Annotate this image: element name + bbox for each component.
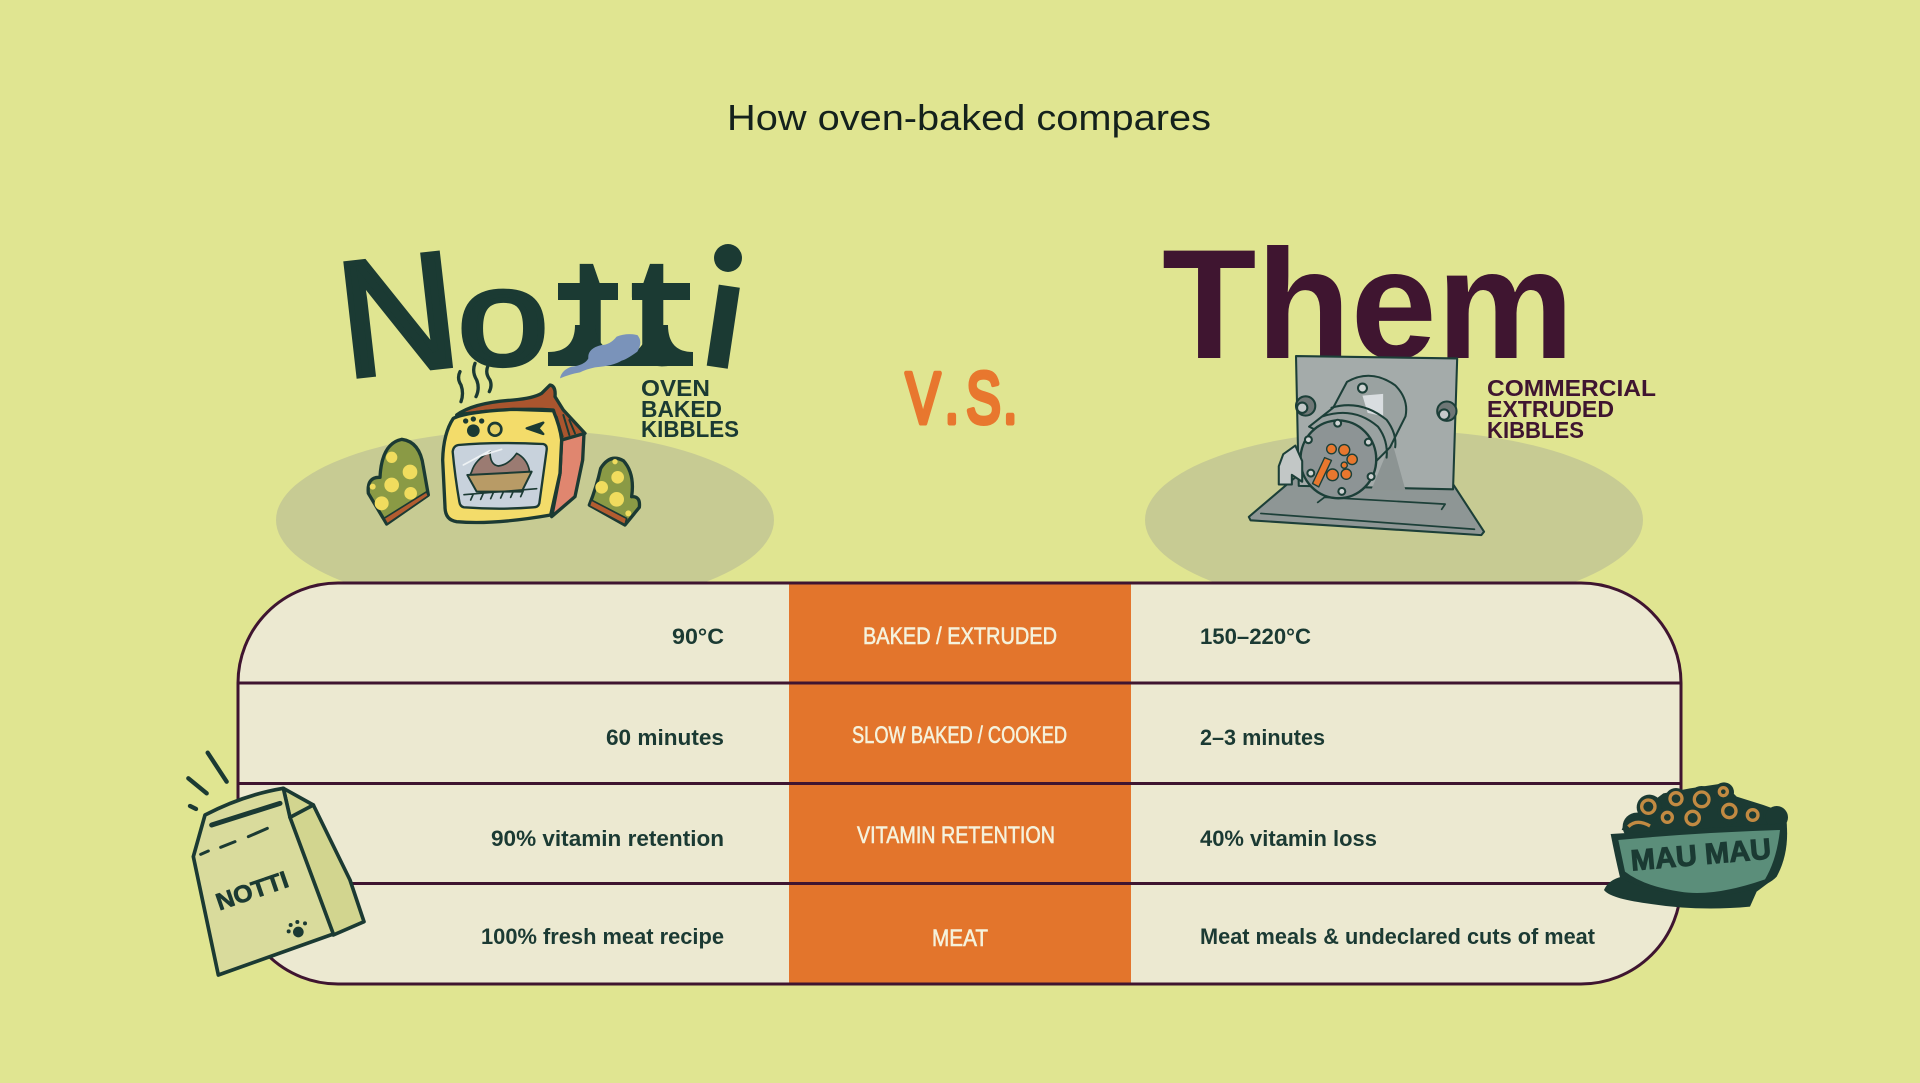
- icon: extruder machine: [1249, 356, 1484, 535]
- center column labels: VITAMIN RETENTION: [857, 822, 1055, 849]
- center column labels: MEAT: [932, 925, 988, 952]
- left nut: [1296, 396, 1315, 416]
- icon: Notti bag: [188, 753, 364, 975]
- heading: Notti logo: i: [691, 226, 759, 403]
- extruded kibble: [1313, 444, 1357, 487]
- left column values: 90% vitamin retention: [491, 826, 724, 851]
- left column values: 90°C: [672, 624, 724, 649]
- base groove: [1261, 497, 1474, 529]
- bowl face: [1618, 830, 1780, 893]
- right column values: Meat meals & undeclared cuts of meat: [1200, 924, 1596, 949]
- dashes: [201, 828, 267, 854]
- left column values: 100% fresh meat recipe: [481, 924, 724, 949]
- text: commercial extruded kibbles: EXTRUDED: [1487, 396, 1614, 422]
- flame knob: [527, 423, 543, 434]
- paw knob: [463, 416, 484, 437]
- heading: Notti logo: N: [329, 217, 467, 412]
- right column values: 40% vitamin loss: [1200, 826, 1377, 851]
- bag label: NOTTI: [212, 866, 292, 916]
- left column values: 60 minutes: [606, 725, 724, 750]
- bolts: [1305, 384, 1375, 495]
- icon: steam: [459, 363, 491, 402]
- icon: Mau Mau bowl: [1604, 782, 1788, 909]
- flap: [290, 805, 313, 817]
- heading: Notti logo: t: [561, 225, 613, 398]
- heading: Notti logo: o: [458, 242, 548, 393]
- right nut: [1437, 401, 1456, 421]
- rays: [188, 753, 227, 809]
- bowl shadow: [1604, 877, 1777, 909]
- right column values: 150–220°C: [1200, 624, 1311, 649]
- heading: Notti logo: [343, 244, 742, 379]
- bowl body: [1611, 823, 1787, 897]
- text: oven baked kibbles: BAKED: [641, 396, 722, 422]
- oven window: [453, 443, 547, 509]
- cylinder shadow: [1371, 440, 1406, 490]
- center column: [789, 583, 1131, 984]
- panel: right ellipse shadow: [1145, 430, 1643, 610]
- motor body: [1309, 376, 1406, 461]
- base plate: [1249, 471, 1484, 535]
- icon: right oven mitt: [589, 458, 640, 525]
- bowl label: MAU MAU: [1629, 833, 1772, 878]
- heading: V.S.: V.S.: [906, 359, 1017, 439]
- oven rack: [464, 489, 537, 500]
- center column labels: SLOW BAKED / COOKED: [852, 722, 1067, 749]
- oven side: [552, 433, 584, 517]
- panel: left ellipse shadow: [276, 430, 774, 610]
- icon: blue smoke: [560, 334, 640, 378]
- center column labels: [852, 623, 1067, 952]
- oven basket: [467, 472, 532, 492]
- text: commercial extruded kibbles: [1487, 375, 1656, 443]
- right column values: 2–3 minutes: [1200, 725, 1325, 750]
- table lines: [238, 583, 1681, 984]
- text: oven baked kibbles: OVEN: [641, 375, 710, 401]
- back plate: [1296, 356, 1457, 489]
- icon: left oven mitt: [368, 439, 428, 524]
- oven roof: [457, 385, 585, 440]
- right column values: [1200, 624, 1596, 949]
- title: How oven-baked compares: [727, 97, 1211, 138]
- front disc: [1300, 420, 1376, 498]
- heading: Them: Them: [1162, 218, 1574, 392]
- oven front: [443, 409, 562, 522]
- paw: [287, 920, 307, 937]
- bag front: [193, 788, 333, 975]
- text: oven baked kibbles: KIBBLES: [641, 416, 739, 442]
- bag handle: [212, 803, 280, 825]
- bag side: [283, 788, 364, 935]
- motor highlight: [1362, 394, 1383, 416]
- text: commercial extruded kibbles: KIBBLES: [1487, 417, 1584, 443]
- icon: oven: [443, 385, 585, 522]
- panel: comparison table: [238, 583, 1681, 984]
- text: oven baked kibbles: [641, 375, 739, 442]
- heading: Notti logo: t: [630, 225, 682, 398]
- center column labels: BAKED / EXTRUDED: [863, 623, 1057, 650]
- roof ribs: [557, 415, 575, 437]
- motor rings: [1323, 405, 1395, 458]
- left column values: [481, 624, 724, 949]
- table background: [238, 583, 1681, 984]
- dial: [489, 423, 501, 436]
- left bracket: [1279, 446, 1302, 484]
- kibble rings: [1628, 788, 1758, 827]
- oven food: [470, 452, 529, 475]
- glass highlights: [463, 449, 502, 465]
- text: commercial extruded kibbles: COMMERCIAL: [1487, 375, 1656, 401]
- kibble pile: [1622, 782, 1788, 841]
